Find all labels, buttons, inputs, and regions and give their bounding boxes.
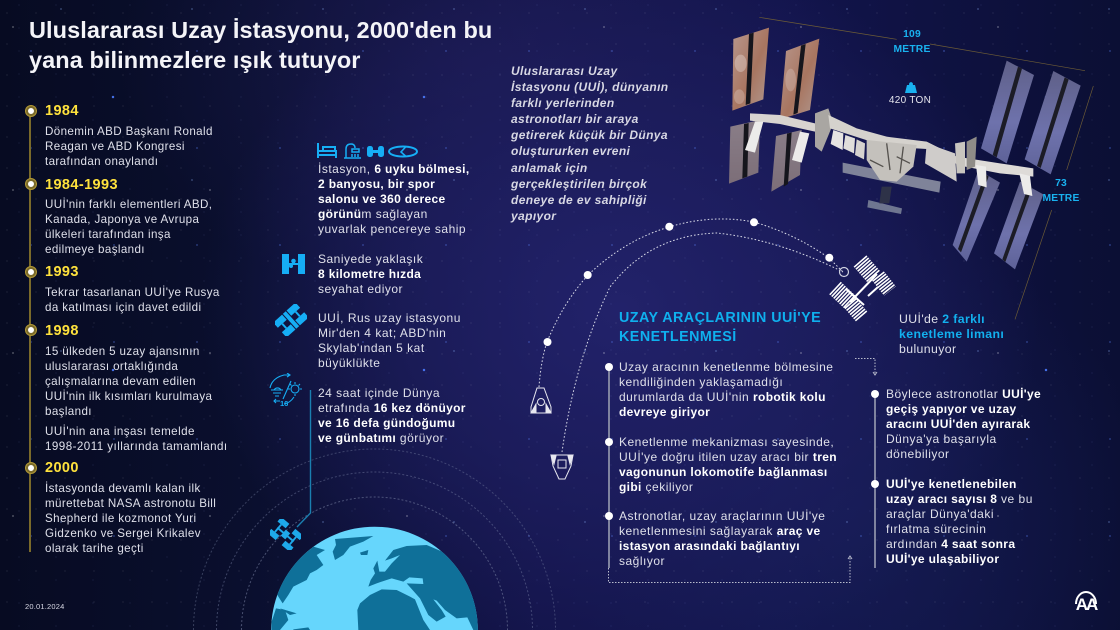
text 2000: İstasyonda devamlı kalan ilk — [45, 482, 201, 495]
text: amenities: salonu ve 360 derece — [318, 192, 446, 206]
intro text: astronotları bir araya — [511, 112, 639, 126]
text 2000: mürettebat NASA astronotu Bill — [45, 497, 216, 510]
text 1984-1993: UUİ'nin farklı elementleri ABD, — [45, 198, 212, 211]
step text 2: vagonunun lokomotife bağlanması — [619, 465, 828, 479]
docking heading: UZAY ARAÇLARININ UUİ'YE — [619, 310, 821, 326]
step text 3 — [619, 509, 825, 568]
text: orbit: 24 saat içinde Dünya — [318, 386, 440, 400]
label: length 109 metre — [893, 29, 931, 55]
text 2000: Shepherd ile kozmonot Yuri — [45, 512, 196, 525]
step text 2: gibi çekiliyor — [619, 480, 693, 494]
step text 3: sağlıyor — [619, 554, 665, 568]
step text 1: devreye giriyor — [619, 405, 710, 419]
docking ports text: bulunuyor — [899, 342, 956, 356]
icon: amenities — [317, 143, 418, 159]
text: size: Mir'den 4 kat; ABD'nin — [318, 326, 446, 340]
text 1998: başlandı — [45, 405, 92, 418]
step marker 3 — [605, 512, 613, 520]
step text 1: kendiliğinden yaklaşamadığı — [619, 375, 783, 389]
text 1984-1993: ülkeleri tarafından inşa — [45, 228, 171, 241]
timeline marker 1984 — [26, 106, 36, 116]
earth and orbits — [193, 448, 556, 630]
text 1998: 15 ülkeden 5 uzay ajansının — [45, 345, 200, 358]
ISS photo illustration — [729, 17, 1094, 320]
text 2000 — [45, 482, 216, 555]
text: orbit: ve günbatımı görüyor — [318, 431, 444, 445]
year 2000: 2000 — [45, 460, 79, 476]
timeline marker 1984-1993 — [26, 179, 36, 189]
right text 1: Dünya'ya başarıyla — [886, 432, 997, 446]
year 1984-1993: 1984-1993 — [45, 177, 118, 193]
text: size: UUİ, Rus uzay istasyonu — [318, 311, 461, 325]
text 1998: çalışmalarına devam edilen — [45, 375, 196, 388]
text: amenities: görünüm sağlayan — [318, 207, 428, 221]
intro text — [510, 64, 669, 223]
text: size: büyüklükte — [318, 356, 380, 370]
right marker 1 — [871, 390, 879, 398]
left solar arrays — [729, 28, 819, 192]
right text 2: UUİ'ye kenetlenebilen — [886, 477, 1017, 491]
step text 1: Uzay aracının kenetlenme bölmesine — [619, 360, 833, 374]
year 1998: 1998 — [45, 323, 79, 339]
timeline — [29, 116, 31, 552]
timeline marker 1993 — [26, 267, 36, 277]
right rail — [874, 394, 876, 568]
intro text: yapıyor — [511, 209, 556, 223]
intro text: Uluslararası Uzay — [511, 64, 618, 78]
right text 1 — [886, 387, 1041, 461]
docking steps rail — [608, 367, 610, 568]
icon: capsule 2 — [550, 454, 574, 480]
text: size — [318, 311, 461, 370]
dimension lines — [759, 17, 1093, 319]
text 1998: uluslararası ortaklığında — [45, 360, 178, 373]
icon: weight — [905, 82, 917, 93]
text 1998 second paragraph: 1998-2011 yıllarında tamamlandı — [45, 440, 228, 453]
step text 3: kenetlenmesini sağlayarak araç ve — [619, 524, 821, 538]
intro text: gerçekleştirilen birçok — [511, 177, 647, 191]
title: yana bilinmezlere ışık tutuyor — [29, 46, 361, 72]
text: orbit: ve 16 defa gündoğumu — [318, 416, 455, 430]
year 1984: 1984 — [45, 103, 79, 119]
step marker 2 — [605, 438, 613, 446]
timeline marker 2000 — [26, 463, 36, 473]
text 1984-1993: edilmeye başlandı — [45, 243, 145, 256]
truss and modules — [745, 108, 1033, 214]
text 1998: UUİ'nin ilk kısımları kurulmaya — [45, 390, 212, 403]
intro text: oluştururken evreni — [511, 144, 630, 158]
text: amenities: İstasyon, 6 uyku bölmesi, — [318, 162, 470, 176]
icon: size station — [275, 304, 307, 336]
label: length 109 metre: 109 — [903, 29, 921, 40]
right text 2: uzay aracı sayısı 8 ve bu — [886, 492, 1033, 506]
intro text: deneye de ev sahipliği — [511, 193, 647, 207]
docking ports text — [899, 312, 1004, 356]
text 1984: Dönemin ABD Başkanı Ronald — [45, 125, 213, 138]
text 1984-1993: Kanada, Japonya ve Avrupa — [45, 213, 199, 226]
text: speed: Saniyede yaklaşık — [318, 252, 423, 266]
icon: sunrise orbit — [270, 373, 302, 407]
step text 2: UUİ'ye doğru itilen uzay aracı bir tren — [619, 450, 837, 464]
docking heading: KENETLENMESİ — [619, 329, 737, 345]
timeline marker 1998 — [26, 325, 36, 335]
right marker 2 — [871, 480, 879, 488]
right text 1: Böylece astronotlar UUİ'ye — [886, 387, 1041, 401]
label: width 73 metre: 73 — [1055, 178, 1067, 189]
label: width 73 metre: METRE — [1042, 193, 1080, 204]
text 2000: olarak tarihe geçti — [45, 542, 144, 555]
text 1984: Reagan ve ABD Kongresi — [45, 140, 185, 153]
text 1993: da katılması için davet edildi — [45, 301, 201, 314]
text: speed: seyahat ediyor — [318, 282, 403, 296]
intro text: getirerek küçük bir Dünya — [511, 128, 668, 142]
intro text: İstasyonu (UUİ), dünyanın — [511, 80, 669, 94]
blue connector line — [296, 390, 312, 528]
text: speed: 8 kilometre hızda — [318, 267, 421, 281]
right text 2 — [886, 477, 1033, 566]
text 1993: Tekrar tasarlanan UUİ'ye Rusya — [45, 286, 220, 299]
intro text: anlamak için — [511, 161, 588, 175]
step text 1 — [619, 360, 833, 419]
intro text: farklı yerlerinden — [511, 96, 615, 110]
text 1998 — [45, 345, 212, 418]
text: orbit: etrafında 16 kez dönüyor — [318, 401, 466, 415]
text 1993 — [45, 286, 220, 314]
right solar arrays — [953, 61, 1081, 269]
text 1998 second paragraph: UUİ'nin ana inşası temelde — [45, 425, 195, 438]
step text 3: Astronotlar, uzay araçlarının UUİ'ye — [619, 509, 825, 523]
step text 2 — [619, 435, 837, 494]
step marker 1 — [605, 363, 613, 371]
label: weight: 420 TON — [889, 95, 931, 106]
title: Uluslararası Uzay İstasyonu, 2000'den bu — [29, 17, 492, 43]
text: speed — [318, 252, 423, 296]
right text 2: araçlar Dünya'daki — [886, 507, 994, 521]
step text 2: Kenetlenme mekanizması sayesinde, — [619, 435, 834, 449]
text: size: Skylab'ından 5 kat — [318, 341, 425, 355]
right text 2: UUİ'ye ulaşabiliyor — [886, 552, 999, 566]
title — [29, 17, 492, 73]
right text 1: geçiş yapıyor ve uzay — [886, 402, 1017, 416]
docking ports text: kenetleme limanı — [899, 327, 1004, 341]
icon: speed station — [282, 254, 305, 274]
text: amenities: yuvarlak pencereye sahip — [318, 222, 466, 236]
text: orbit — [318, 386, 466, 445]
logo: AA: AA — [1076, 595, 1096, 614]
text 1998 second paragraph — [45, 424, 228, 453]
text: amenities: 2 banyosu, bir spor — [318, 177, 435, 191]
icon: small ISS over earth — [270, 519, 301, 550]
text 1984: tarafından onaylandı — [45, 155, 158, 168]
label: length 109 metre: METRE — [893, 44, 931, 55]
date: 20.01.2024 — [25, 602, 65, 611]
text 2000: Gidzenko ve Sergei Krikalev — [45, 527, 201, 540]
text: amenities — [318, 162, 470, 236]
year 1993: 1993 — [45, 264, 79, 280]
right text 2: fırlatma sürecinin — [886, 522, 986, 536]
text 1984 — [45, 125, 213, 168]
icon: capsule 1 — [530, 388, 552, 414]
step text 3: istasyon arasındaki bağlantıyı — [619, 539, 800, 553]
docking ports text: UUİ'de 2 farklı — [899, 312, 985, 326]
right text 1: dönebiliyor — [886, 447, 950, 461]
text 1984-1993 — [45, 198, 212, 256]
docking heading — [619, 310, 821, 345]
right text 1: aracını UUİ'den ayırarak — [886, 417, 1030, 431]
label: width 73 metre — [1042, 178, 1080, 204]
right text 2: ardından 4 saat sonra — [886, 537, 1015, 551]
step text 1: durumlarda da UUİ'nin robotik kolu — [619, 390, 826, 404]
